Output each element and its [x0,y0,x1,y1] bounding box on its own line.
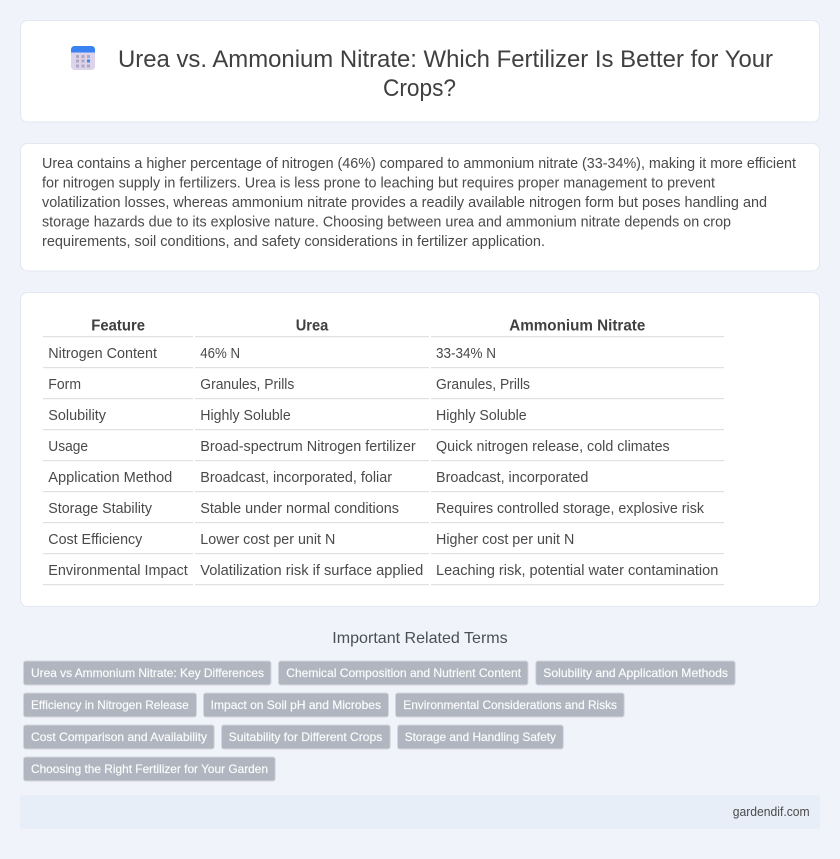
title: Urea vs. Ammonium Nitrate: Which Fertilizer Is Better for Your [118,46,773,73]
tag: Storage and Handling Safety [405,730,556,744]
tag [24,725,214,749]
row: application method: Broadcast, incorporated [436,470,588,486]
summary text block: requirements, soil conditions, and safety considerations in fertilizer application. [42,234,545,250]
summary text block: for nitrogen supply in fertilizers. Urea is less prone to leaching but requires proper management to prevent [42,176,715,192]
summary text block: volatilization losses, whereas ammonium nitrate provides a readily available nitrogen form but poses handling and [42,195,767,211]
row: usage [48,439,670,455]
related terms tags [24,661,735,781]
tag: Urea vs Ammonium Nitrate: Key Differences [31,666,264,680]
row: storage stability: Requires controlled storage, explosive risk [436,501,705,517]
tag: Suitability for Different Crops [229,730,382,744]
row: usage: Usage [48,439,88,455]
tag: Environmental Considerations and Risks [403,698,617,712]
row: solubility [48,408,527,424]
row: usage: Quick nitrogen release, cold climates [436,439,670,455]
row: environmental impact: Leaching risk, potential water contamination [436,563,718,579]
icon: calendar [71,46,95,70]
row: form: Granules, Prills [200,377,294,393]
tag [536,661,735,685]
row: environmental impact: Environmental Impact [48,563,188,579]
tag: Efficiency in Nitrogen Release [31,698,189,712]
tag [24,661,271,685]
row: solubility: Solubility [48,408,107,424]
title [118,46,773,102]
table header row: Urea [296,318,329,334]
row: environmental impact: Volatilization risk if surface applied [200,563,423,579]
row: application method [48,470,588,486]
tag [398,725,563,749]
tag [278,661,528,685]
panel: summary [20,144,820,271]
row: solubility: Highly Soluble [436,408,527,424]
row: cost efficiency: Higher cost per unit N [436,532,574,548]
table header row: Ammonium Nitrate [509,318,646,334]
panel: title header [20,20,820,122]
table header row: Feature [91,318,145,334]
row: environmental impact [48,563,718,579]
row: application method: Broadcast, incorporated, foliar [200,470,392,486]
tag [24,757,275,781]
row: storage stability: Stable under normal conditions [200,501,399,517]
row: cost efficiency: Cost Efficiency [48,532,143,548]
row: usage: Broad-spectrum Nitrogen fertilizer [200,439,416,455]
tag [222,725,390,749]
tag [24,693,196,717]
tag: Chemical Composition and Nutrient Content [286,666,522,680]
row: application method: Application Method [48,470,172,486]
summary text block: storage hazards due to its explosive nature. Choosing between urea and ammonium nitrate depends on crop [42,214,731,230]
row: nitrogen content: Nitrogen Content [48,346,157,362]
summary text block [42,156,796,250]
row: solubility: Highly Soluble [200,408,291,424]
table header row [91,318,646,334]
heading: important related terms: Important Related Terms [332,630,508,647]
tag: Cost Comparison and Availability [31,730,207,744]
row: nitrogen content: 33-34% N [436,346,496,362]
tag [396,693,624,717]
row: form [48,377,530,393]
row: nitrogen content: 46% N [200,346,240,362]
row: cost efficiency: Lower cost per unit N [200,532,335,548]
row: form: Granules, Prills [436,377,530,393]
tag [204,693,388,717]
row: nitrogen content [48,346,496,362]
panel: comparison table [20,292,820,606]
tag: Impact on Soil pH and Microbes [211,698,381,712]
footer bar [20,795,820,829]
title: Crops? [383,75,456,102]
footer source: gardendif.com [733,805,810,819]
row: storage stability: Storage Stability [48,501,153,517]
row: form: Form [48,377,81,393]
tag: Choosing the Right Fertilizer for Your Garden [31,762,268,776]
row: cost efficiency [48,532,574,548]
summary text block: Urea contains a higher percentage of nitrogen (46%) compared to ammonium nitrate (33-34%), making it more efficient [42,156,796,172]
row: storage stability [48,501,705,517]
tag: Solubility and Application Methods [543,666,728,680]
